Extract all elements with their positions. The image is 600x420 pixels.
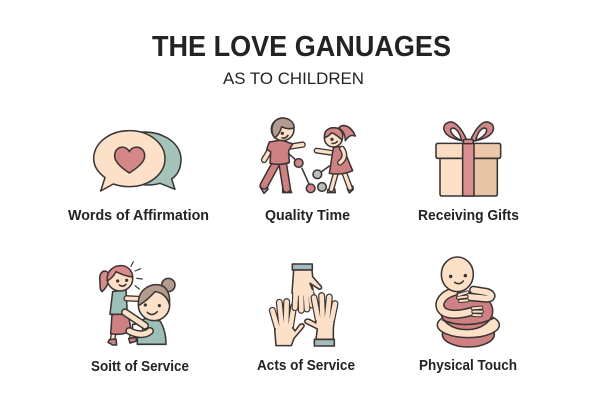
right hand [305,296,335,346]
label: acts of service: Acts of Service [257,357,355,374]
balls [288,153,329,193]
label: soitt of service: Soitt of Service [91,358,189,375]
label: physical touch: Physical Touch [419,357,517,374]
label: receiving gifts: Receiving Gifts [418,207,519,224]
label: quality time: Quality Time [265,207,350,224]
icon: hugging figure [437,257,499,347]
arms [440,290,491,314]
girl [317,126,355,193]
girl [100,266,141,345]
icon: parent and child playing [260,118,355,193]
icon: mother and daughter [100,262,175,345]
left hand [272,302,304,346]
pink coil [437,292,499,347]
rays [131,262,142,289]
icon: gift box [436,122,501,196]
top hand [292,264,322,310]
icon: speech bubbles with heart [94,131,181,191]
boy [260,118,303,193]
title: THE LOVE GANUAGES [152,31,451,63]
subtitle: AS TO CHILDREN [223,69,364,88]
icon: three hands [272,264,335,346]
hands [458,292,482,315]
head [441,257,473,292]
mother [125,278,175,344]
label: words of affirmation: Words of Affirmation [68,207,209,224]
